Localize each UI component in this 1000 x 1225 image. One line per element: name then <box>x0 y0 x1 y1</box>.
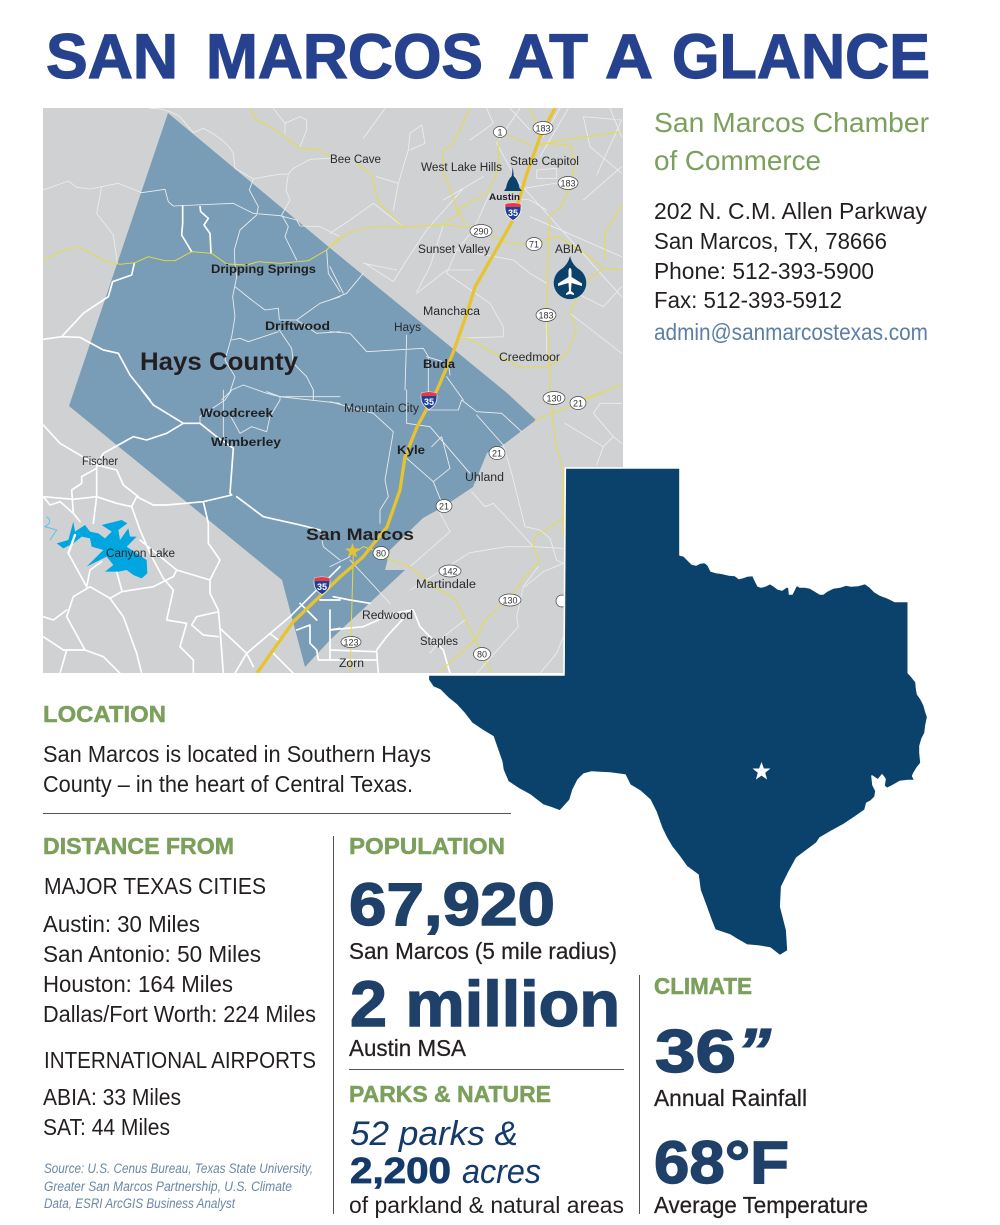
city distances: San Antonio: 50 Miles <box>43 941 261 967</box>
icon: airport pin <box>554 256 586 299</box>
stat: 67,920: 67,920 <box>349 871 555 938</box>
address and phone <box>654 198 927 313</box>
Texas state map <box>428 468 928 956</box>
source note: Data, ESRI ArcGIS Business Analyst <box>44 1196 236 1211</box>
major cities subheading: MAJOR TEXAS CITIES <box>44 873 266 899</box>
highway shields: 21 <box>573 398 583 408</box>
stat: rainfall: 36 <box>655 1018 736 1085</box>
interstate shield: San Marcos: 35 <box>317 582 327 592</box>
highway shields: 21 <box>492 448 502 458</box>
map place labels: West Lake Hills <box>421 162 502 174</box>
map place labels: Canyon Lake <box>106 548 175 560</box>
map place labels: Sunset Valley <box>418 244 490 256</box>
airport distances: SAT: 44 Miles <box>43 1114 170 1140</box>
road network <box>43 108 622 673</box>
parks heading: PARKS & NATURE <box>349 1081 551 1107</box>
map place labels: San Marcos <box>306 525 414 544</box>
stat: rainfall: ” <box>737 1017 771 1086</box>
source note <box>44 1161 313 1211</box>
stat: temperature: 68°F <box>654 1129 789 1196</box>
climate heading: CLIMATE <box>654 973 752 999</box>
map place labels: Martindale <box>416 579 476 591</box>
title: A <box>605 22 653 92</box>
parks label: of parkland & natural areas <box>349 1192 624 1218</box>
map place labels: Kyle <box>397 445 425 457</box>
city distances <box>43 911 316 1027</box>
acres bold number: 2,200 <box>350 1150 451 1191</box>
chamber heading line 2: of Commerce <box>654 145 821 176</box>
panel: parks and nature <box>349 1081 624 1218</box>
source note: Source: U.S. Cenus Bureau, Texas State University, <box>44 1161 313 1176</box>
stat label: San Marcos radius: San Marcos (5 mile radius) <box>349 938 617 964</box>
map place labels: Woodcreek <box>200 408 274 420</box>
highway shields: 130 <box>502 596 518 606</box>
address and phone: San Marcos, TX, 78666 <box>654 228 887 254</box>
icon: state capitol pin <box>504 167 522 191</box>
highway shields: 80 <box>376 548 386 558</box>
title: GLANCE <box>672 22 930 92</box>
city distances: Dallas/Fort Worth: 224 Miles <box>43 1001 316 1027</box>
highway shields: 142 <box>442 566 458 576</box>
panel: population <box>349 833 620 1061</box>
interstate shield: Kyle <box>421 392 437 410</box>
interstate shield: San Marcos <box>314 577 330 594</box>
address and phone: 202 N. C.M. Allen Parkway <box>654 198 927 224</box>
title: SAN <box>46 22 178 92</box>
star: San Marcos location <box>752 762 770 780</box>
parks count: 52 parks & <box>350 1115 518 1153</box>
map place labels: Zorn <box>339 658 364 670</box>
map place labels: Wimberley <box>211 437 282 449</box>
map place labels: State Capitol <box>510 156 579 168</box>
stat label: Austin MSA: Austin MSA <box>349 1035 467 1061</box>
map place labels: Staples <box>420 636 458 648</box>
highway shields: 80 <box>477 650 487 660</box>
map panel <box>43 108 623 673</box>
highway shields: 183 <box>535 124 551 134</box>
address and phone: Fax: 512-393-5912 <box>654 287 842 313</box>
stat: rainfall <box>655 1017 771 1086</box>
highway shields <box>341 122 586 660</box>
map place labels: Manchaca <box>423 306 481 318</box>
distance heading: DISTANCE FROM <box>43 833 234 859</box>
panel: distance from <box>43 833 316 1211</box>
map place labels: Buda <box>423 359 456 371</box>
email: admin@sanmarcostexas.com <box>654 319 928 345</box>
map place labels: Bee Cave <box>330 154 381 166</box>
highway shields: 21 <box>439 502 449 512</box>
city distances: Houston: 164 Miles <box>43 971 233 997</box>
population heading: POPULATION <box>349 833 505 859</box>
map place labels: Creedmoor <box>499 352 560 364</box>
map place labels: Redwood <box>362 610 413 622</box>
address and phone: Phone: 512-393-5900 <box>654 258 874 284</box>
airports subheading: INTERNATIONAL AIRPORTS <box>44 1047 316 1073</box>
temperature label: Average Temperature <box>654 1192 868 1218</box>
Canyon Lake <box>45 517 147 578</box>
rainfall label: Annual Rainfall <box>654 1085 807 1111</box>
interstate shield: Kyle: 35 <box>424 397 434 407</box>
title: MARCOS <box>206 22 483 92</box>
Hays County shape <box>69 113 536 667</box>
highway shields: 130 <box>546 394 562 404</box>
highway shields: 123 <box>343 638 359 648</box>
San Marcos star marker <box>345 543 360 558</box>
highway shields: 183 <box>538 310 554 320</box>
airport distances <box>43 1084 181 1140</box>
panel: location <box>43 701 431 797</box>
panel: climate <box>654 973 868 1218</box>
chamber heading: San Marcos Chamber <box>654 107 929 138</box>
interstate shield: Austin: 35 <box>508 208 518 218</box>
map place labels: Hays County <box>140 348 298 376</box>
city distances: Austin: 30 Miles <box>43 911 200 937</box>
title: AT <box>508 22 588 92</box>
map place labels: ABIA <box>555 244 582 256</box>
map place labels: Austin <box>489 192 520 203</box>
map place labels <box>82 154 582 670</box>
highway shields: 183 <box>560 178 576 188</box>
map place labels: Mountain City <box>344 403 419 415</box>
airport distances: ABIA: 33 Miles <box>43 1084 181 1110</box>
interstate shield: Austin <box>505 203 521 220</box>
highway shields: 290 <box>473 226 489 236</box>
panel: chamber contact <box>654 107 929 345</box>
Interstate 35 highway <box>257 108 555 673</box>
map place labels: Driftwood <box>265 321 330 333</box>
map place labels: Hays <box>394 322 421 334</box>
map background <box>43 108 623 673</box>
map place labels: Fischer <box>82 456 118 468</box>
highway shields: 71 <box>529 240 539 250</box>
highway shields: 1 <box>497 128 503 138</box>
location text <box>43 741 431 797</box>
map place labels: Dripping Springs <box>211 264 316 276</box>
location heading: LOCATION <box>43 701 166 727</box>
title <box>46 22 930 92</box>
location text: San Marcos is located in Southern Hays <box>43 741 431 767</box>
source note: Greater San Marcos Partnership, U.S. Climate <box>44 1179 292 1194</box>
acres word: acres <box>462 1153 541 1191</box>
map place labels: Uhland <box>465 472 504 484</box>
location text: County – in the heart of Central Texas. <box>43 771 413 797</box>
stat: 2 million: 2 million <box>350 968 620 1040</box>
